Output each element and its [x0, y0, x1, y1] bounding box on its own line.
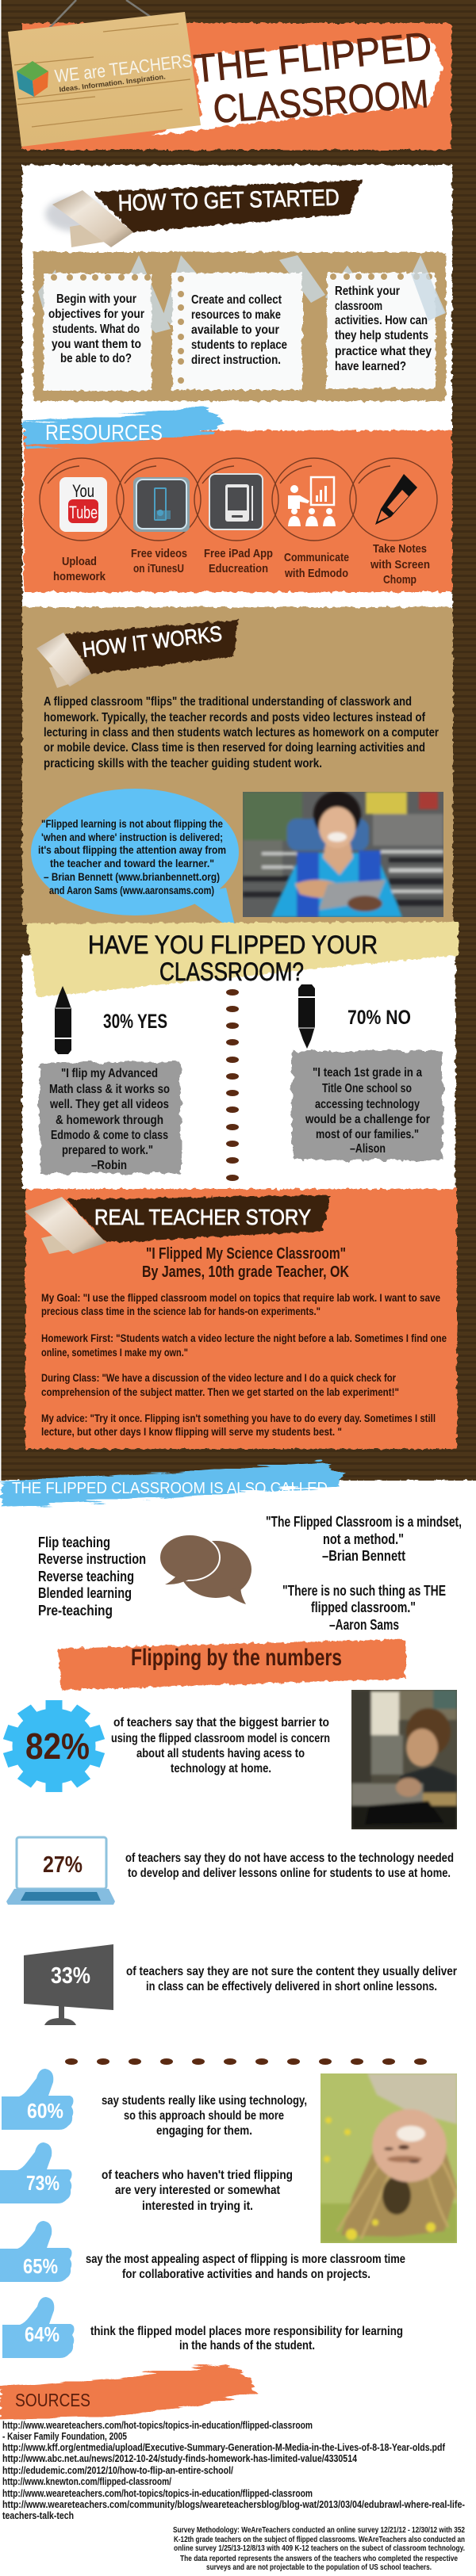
- heading: real teacher story: [25, 1195, 331, 1254]
- icon: pencil: [375, 474, 417, 525]
- stat: 73% thumb: [0, 2142, 71, 2203]
- panel: yes quote: prepared to work.": [62, 1144, 153, 1157]
- resource labels: Free iPad App: [204, 547, 273, 560]
- heading: have you flipped your classroom: HAVE YOU FLIPPED YOUR: [88, 931, 378, 959]
- stat text: 82%: using the flipped classroom model is concern: [111, 1732, 330, 1745]
- panel: resources: [24, 406, 452, 592]
- story title: By James, 10th grade Teacher, OK: [142, 1263, 349, 1281]
- note 3: Rethink your: [335, 285, 400, 298]
- resource labels: homework: [53, 570, 106, 583]
- hanging strings: [40, 0, 164, 38]
- title: CLASSROOM: [212, 71, 430, 132]
- note 3: activities. How can: [335, 314, 428, 327]
- heading: flipping by the numbers: [58, 1639, 405, 1690]
- panel: steps corkboard: [33, 252, 446, 401]
- stat: 60% thumb: [2, 2069, 73, 2130]
- panel: yes quote: [40, 1062, 181, 1173]
- stat: 65% thumb: 65%: [23, 2254, 58, 2278]
- icon: Edmodo classroom: [288, 477, 336, 526]
- quotes: mindset: not a method.": [323, 1531, 404, 1547]
- story text: comprehension of the subject matter. Then we get started on the lab experiment!": [41, 1386, 399, 1398]
- source links: teachers-talk-tech: [2, 2509, 74, 2521]
- panel: yes quote: Math class & it works so: [49, 1083, 170, 1096]
- stat: 65% thumb: [0, 2221, 71, 2282]
- source links: http://www.weareteachers.com/hot-topics/topics-in-education/flipped-classroom: [2, 2487, 313, 2499]
- stat text: 64%: [90, 2325, 403, 2352]
- stat: 27% laptop: 27%: [43, 1852, 83, 1878]
- stat text: 64%: think the flipped model places more responsibility for learning: [90, 2325, 403, 2338]
- heading: how to get started: HOW TO GET STARTED: [117, 185, 340, 216]
- panel: no quote: would be a challenge for: [305, 1113, 430, 1126]
- heading: how it works: HOW IT WORKS: [81, 621, 223, 662]
- background: brown corrugated cardboard: [0, 0, 476, 1481]
- stat text: 73%: are very interested or somewhat: [115, 2184, 281, 2197]
- note 1: be able to do?: [60, 352, 132, 365]
- heading: also called brush: THE FLIPPED CLASSROOM IS ALSO CALLED: [12, 1480, 328, 1497]
- list of alternate names: Blended learning: [38, 1585, 132, 1601]
- stat text: 73%: interested in trying it.: [142, 2200, 253, 2213]
- white paint splash behind title: [152, 36, 443, 136]
- panel: white background for how to get started and resources: [22, 165, 452, 607]
- note 3: have learned?: [335, 360, 406, 373]
- stat text: 60%: [102, 2094, 307, 2138]
- stat text: 64%: in the hands of the student.: [179, 2339, 315, 2352]
- stat text: 65%: say the most appealing aspect of flipping is more classroom time: [86, 2253, 405, 2266]
- note 3: they help students: [335, 329, 428, 342]
- quote text: – Brian Bennett (www.brianbennett.org): [44, 870, 220, 883]
- stat text: 82%: about all students having acess to: [136, 1747, 305, 1760]
- panel: real teacher story: [25, 1189, 457, 1449]
- photo: boy at computer: [351, 1690, 457, 1829]
- stat: 82% gear: 82%: [25, 1726, 90, 1767]
- note 1: you want them to: [52, 338, 141, 351]
- poll result: 30% yes: 30% YES: [103, 1011, 167, 1033]
- story text: online, sometimes I make my own.": [41, 1347, 188, 1359]
- resource labels: Upload: [62, 555, 97, 568]
- stat text: 60%: say students really like using technology,: [102, 2094, 307, 2108]
- heading: have you flipped your classroom: [88, 931, 378, 986]
- heading: also called brush: [2, 1462, 346, 1508]
- list of alternate names: [38, 1535, 146, 1619]
- list of alternate names: Flip teaching: [38, 1535, 110, 1550]
- heading: have you flipped your classroom: CLASSROOM?: [159, 957, 304, 986]
- source links: http://www.abc.net.au/news/2012-10-24/study-finds-homework-has-limited-value/4330514: [2, 2452, 358, 2464]
- panel: yes quote: well. They get all videos: [49, 1098, 169, 1111]
- quotes: mindset: –Brian Bennett: [322, 1548, 405, 1564]
- photo: upside-down child: [321, 2073, 457, 2243]
- note 2: [172, 273, 302, 390]
- stat text: 27%: [125, 1852, 454, 1880]
- quote text: the teacher and toward the learner.": [50, 857, 214, 869]
- logo wordmark: WE are TEACHERS: [54, 50, 193, 86]
- panel: no quote: most of our families.": [316, 1128, 419, 1141]
- list of alternate names: Reverse instruction: [38, 1551, 146, 1567]
- panel: header: [8, 0, 451, 150]
- note 1: students. What do: [52, 323, 140, 336]
- title: [192, 24, 434, 132]
- story text: lecture, but other days I know flipping will serve my students best. ": [41, 1426, 342, 1438]
- wood sign with logo: [8, 12, 201, 147]
- panel: have you flipped, white page: [22, 955, 455, 1189]
- story text: [41, 1292, 447, 1438]
- stat text: 73%: [102, 2169, 293, 2213]
- panel: yes quote: –Robin: [91, 1159, 127, 1172]
- resource labels: on iTunesU: [133, 562, 184, 575]
- heading: flipping by the numbers: Flipping by the numbers: [131, 1645, 342, 1671]
- panel: no quote: Title One school so: [322, 1082, 412, 1095]
- quotes: mindset: –Aaron Sams: [329, 1617, 399, 1633]
- panel: no quote: "I teach 1st grade in a: [313, 1066, 422, 1080]
- survey methodology: [173, 2525, 465, 2572]
- note 2: Create and collect: [191, 293, 282, 307]
- stat: 64% thumb: 64%: [25, 2322, 60, 2346]
- note 2: resources to make: [191, 308, 281, 322]
- resource labels: with Edmodo: [284, 567, 348, 580]
- quote text: 'when and where' instruction is delivered;: [41, 831, 223, 843]
- resource labels: Take Notes: [373, 542, 427, 556]
- source links: http://edudemic.com/2012/10/how-to-flip-an-entire-school/: [2, 2464, 233, 2476]
- panel: yes quote: "I flip my Advanced: [61, 1067, 158, 1080]
- stat: 60% thumb: 60%: [27, 2099, 63, 2123]
- stat: 82% gear: [3, 1700, 105, 1792]
- speech bubble quote: [31, 789, 239, 932]
- quote text: it's about flipping the attention away from: [38, 843, 226, 856]
- title: THE FLIPPED: [192, 24, 434, 91]
- note 1: objectives for your: [48, 308, 144, 321]
- source links: http://www.knewton.com/flipped-classroom/: [2, 2475, 171, 2487]
- how it works paragraph: [44, 695, 439, 770]
- resource labels: Educreation: [209, 562, 268, 575]
- quote text: [38, 817, 226, 896]
- note 1: Begin with your: [56, 292, 136, 306]
- quote text: and Aaron Sams (www.aaronsams.com): [49, 884, 214, 896]
- panel: yes quote: & homework through: [56, 1114, 163, 1127]
- how it works paragraph: A flipped classroom "flips" the traditional understanding of classwork and: [44, 695, 412, 709]
- stat text: 65%: for collaborative activities and hands on projects.: [122, 2268, 370, 2281]
- icon: YouTube: You: [72, 481, 94, 501]
- dotted divider horizontal: [65, 2058, 427, 2065]
- stat text: 65%: [86, 2253, 405, 2281]
- icon: YouTube: Tube: [69, 503, 98, 522]
- dotted divider: [226, 989, 239, 1181]
- lower white page: [0, 1481, 476, 2576]
- resource labels: [53, 542, 430, 587]
- source links: http://www.weareteachers.com/hot-topics/topics-in-education/flipped-classroom: [2, 2419, 313, 2431]
- stat: 33% monitor: [24, 1944, 113, 2025]
- heading: how it works: [36, 620, 238, 688]
- icon: logo die: [17, 61, 48, 97]
- source links: - Kaiser Family Foundation, 2005: [2, 2430, 127, 2442]
- quotes: mindset: flipped classroom.": [311, 1599, 416, 1615]
- note 1: [44, 273, 152, 391]
- header orange torn panel: [22, 23, 451, 150]
- panel: no quote: –Alison: [350, 1142, 386, 1156]
- how it works paragraph: practicing skills with the teacher guiding student work.: [44, 757, 322, 770]
- stat text: 82%: of teachers say that the biggest barrier to: [113, 1716, 329, 1729]
- photo: smiling student with tablet: [243, 791, 443, 917]
- heading: sources brush: SOURCES: [15, 2390, 90, 2410]
- stat: 73% thumb: 73%: [26, 2171, 60, 2195]
- story text: precious class time in the science lab for hands-on experiments.": [41, 1305, 321, 1317]
- panel: no quote: accessing technology: [315, 1098, 420, 1111]
- resource labels: with Screen: [370, 558, 430, 571]
- stat text: 82%: [111, 1716, 330, 1775]
- heading: resources brush: RESOURCES: [45, 420, 163, 445]
- list of alternate names: Reverse teaching: [38, 1569, 134, 1584]
- note 3: [327, 273, 444, 388]
- panel: how it works: [22, 607, 453, 932]
- stat text: 33%: [126, 1965, 457, 1993]
- decorative tape: [38, 255, 446, 333]
- quotes: mindset: [266, 1514, 462, 1633]
- sketched circles: [40, 458, 437, 541]
- icon: speech bubbles: [159, 1535, 251, 1604]
- icon: iPad app: [209, 474, 263, 529]
- yellow notebook paper: [26, 922, 459, 997]
- resource labels: Free videos: [131, 547, 187, 560]
- quote text: "Flipped learning is not about flipping the: [41, 817, 223, 830]
- stat: 33% monitor: 33%: [51, 1963, 90, 1989]
- heading: real teacher story: REAL TEACHER STORY: [94, 1205, 311, 1229]
- icon: pencil down: [298, 984, 315, 1049]
- stat text: 82%: technology at home.: [171, 1762, 271, 1775]
- resource labels: Chomp: [383, 573, 416, 587]
- icon: pencil up: [55, 986, 71, 1054]
- poll result: 70% no: 70% NO: [347, 1007, 411, 1029]
- note 3: classroom: [335, 300, 382, 313]
- note 2: available to your: [191, 323, 279, 337]
- note 2: direct instruction.: [191, 354, 281, 367]
- heading: resources brush: [24, 406, 225, 447]
- story title: "I Flipped My Science Classroom": [146, 1245, 346, 1263]
- panel: yes quote: Edmodo & come to class: [51, 1129, 168, 1142]
- list of alternate names: Pre-teaching: [38, 1603, 113, 1619]
- stat: 64% thumb: [2, 2297, 75, 2358]
- source links: [2, 2419, 465, 2521]
- story title: [142, 1245, 349, 1281]
- icon: iTunesU player: [133, 477, 190, 532]
- stat text: 60%: engaging for them.: [156, 2124, 252, 2138]
- stat text: 73%: of teachers who haven't tried flipping: [102, 2169, 293, 2182]
- stat: 27% laptop: [6, 1837, 115, 1905]
- resource labels: Communicate: [284, 551, 349, 564]
- panel: no quote: [292, 1051, 443, 1160]
- heading: sources brush: [0, 2364, 255, 2420]
- note 3: practice what they: [335, 345, 432, 358]
- icon: YouTube: [60, 477, 107, 532]
- stat text: 60%: so this approach should be more: [124, 2109, 284, 2123]
- heading: how to get started: [45, 180, 363, 247]
- story text: During Class: "We have a discussion of the video lecture and I do a quick check for: [41, 1372, 397, 1384]
- logo tagline: Ideas. Information. Inspiration.: [59, 73, 166, 94]
- note 2: students to replace: [191, 338, 287, 352]
